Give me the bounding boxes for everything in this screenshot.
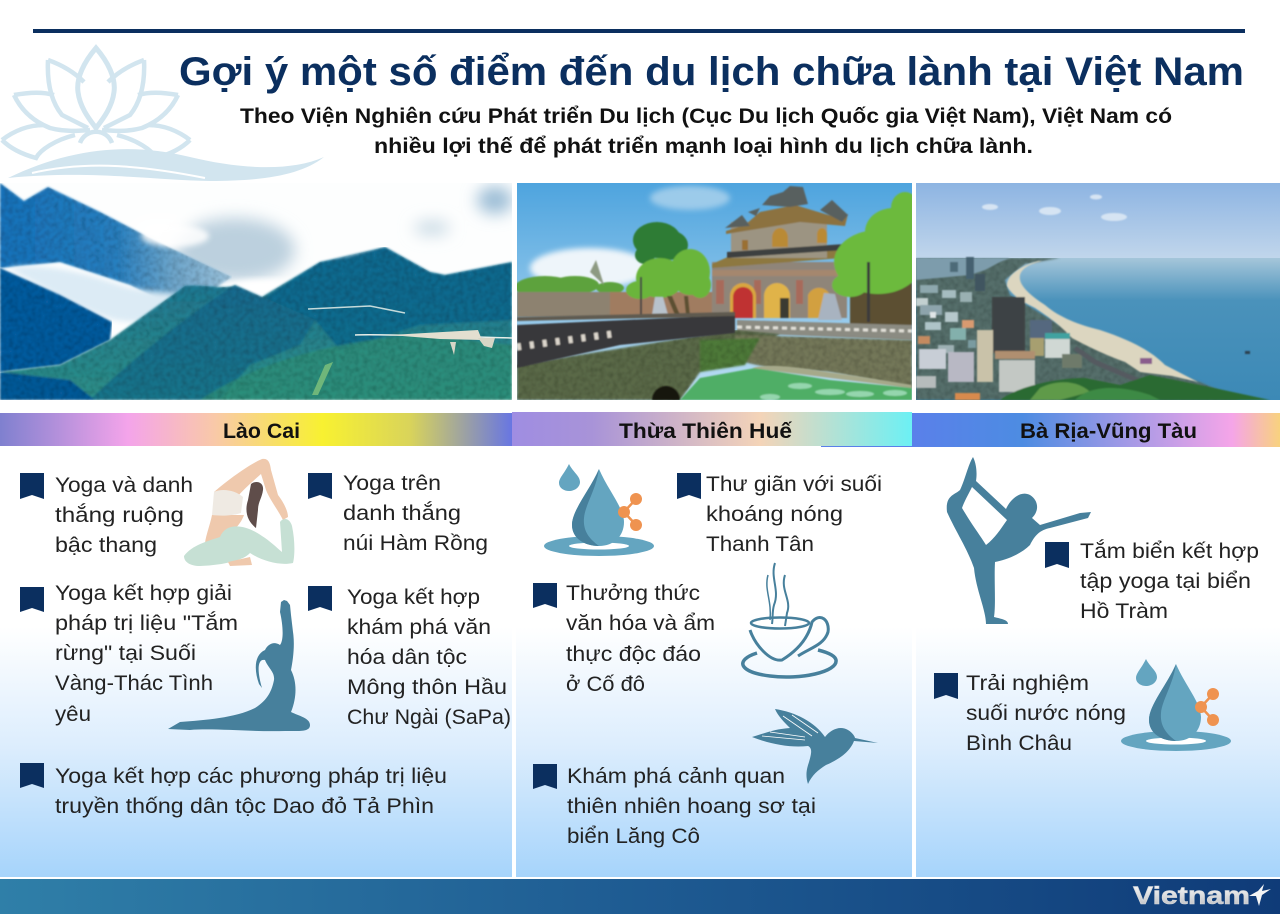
list item: Tắm biển kết hợp tập yoga tại biển Hồ Tràm: [1045, 538, 1259, 623]
list item: Yoga kết hợp khám phá văn hóa dân tộc Mông: Chư Ngài (SaPa): [347, 705, 511, 729]
list item: Yoga kết hợp giải pháp trị liệu Tắm rừng: yêu: [55, 702, 91, 726]
list item: Thưởng thức văn hóa và ẩm thực độc đáo ở Cố đô: [533, 581, 715, 696]
icon: mineral water drop (Thanh Tân): [544, 464, 654, 556]
list item: Khám phá cảnh quan thiên nhiên biển Lăng Cô: [533, 764, 816, 848]
header band: Thừa Thiên Huế: Thừa Thiên Huế: [619, 420, 792, 443]
list item: Khám phá cảnh quan thiên nhiên biển Lăng Cô: Khám phá cảnh quan: [567, 764, 785, 788]
footer bar: [0, 879, 1280, 914]
pond: [680, 368, 912, 400]
gate upper storey: [731, 222, 827, 258]
list item: Yoga kết hợp các phương pháp trị liệu truyền thống: [20, 763, 447, 818]
list item: Yoga và danh thắng ruộng bậc thang: [20, 473, 193, 557]
subtitle: Theo Viện Nghiên cứu Phát triển Du lịch (Cục Du lịch Quốc gia Việt Nam), Việt Nam có: [240, 104, 1172, 128]
list item: Yoga kết hợp khám phá văn hóa dân tộc Mông: Mông thôn Hầu: [347, 675, 507, 699]
gate lower storey: [712, 262, 847, 318]
list item: Thư giãn với suối khoáng nóng Thanh Tân: [677, 472, 882, 556]
list item: Thưởng thức văn hóa và ẩm thực độc đáo ở Cố đô: Thưởng thức: [566, 581, 700, 605]
icon: dancer pose silhouette: [947, 457, 1091, 624]
list item: Thưởng thức văn hóa và ẩm thực độc đáo ở Cố đô: ở Cố đô: [566, 672, 645, 696]
list item: Thư giãn với suối khoáng nóng Thanh Tân: Thư giãn với suối: [706, 472, 882, 496]
list item: Yoga kết hợp giải pháp trị liệu Tắm rừng: rừng" tại Suối: [55, 641, 196, 665]
list item: Thư giãn với suối khoáng nóng Thanh Tân: Thanh Tân: [706, 532, 814, 556]
list item: Yoga kết hợp các phương pháp trị liệu truyền thống: truyền thống dân tộc Dao đỏ Tả Phìn: [55, 794, 434, 818]
header band: Bà Rịa-Vũng Tàu: [912, 413, 1280, 447]
right trees: [850, 280, 912, 325]
list item: Yoga kết hợp khám phá văn hóa dân tộc Mông: hóa dân tộc: [347, 645, 467, 669]
photo: Vũng Tàu coastline: [916, 183, 1280, 400]
list item: Yoga kết hợp giải pháp trị liệu Tắm rừng: Vàng-Thác Tình: [55, 671, 213, 695]
list item: Yoga trên danh thắng núi Hàm Rồng: [308, 471, 488, 555]
header band: Lào Cai: Lào Cai: [223, 420, 300, 443]
photo: Huế imperial citadel gate: [515, 183, 922, 400]
list item: Tắm biển kết hợp tập yoga tại biển Hồ Tràm: tập yoga tại biển: [1080, 569, 1251, 593]
list item: Thưởng thức văn hóa và ẩm thực độc đáo ở Cố đô: thực độc đáo: [566, 642, 701, 666]
list item: Yoga kết hợp các phương pháp trị liệu truyền thống: Yoga kết hợp các phương pháp trị liệu: [55, 764, 447, 788]
photo: Lào Cai mountains: [0, 183, 513, 400]
list item: Yoga kết hợp giải pháp trị liệu Tắm rừng: Yoga kết hợp giải: [55, 581, 232, 605]
icon: tea cup: [743, 563, 836, 677]
header band: Lào Cai: [0, 413, 512, 446]
list item: Thưởng thức văn hóa và ẩm thực độc đáo ở Cố đô: văn hóa và ẩm: [566, 611, 715, 635]
list item: Tắm biển kết hợp tập yoga tại biển Hồ Tràm: Hồ Tràm: [1080, 599, 1168, 623]
header band: Thừa Thiên Huế: [512, 412, 912, 447]
list item: Trải nghiệm suối nước nóng Bình Châu: Trải nghiệm: [966, 671, 1089, 695]
subtitle: [240, 104, 1172, 158]
list item: Trải nghiệm suối nước nóng Bình Châu: suối nước nóng: [966, 701, 1126, 725]
background panels: [0, 446, 1280, 877]
list item: Tắm biển kết hợp tập yoga tại biển Hồ Tràm: Tắm biển kết hợp: [1080, 538, 1259, 563]
list item: Khám phá cảnh quan thiên nhiên biển Lăng Cô: biển Lăng Cô: [567, 824, 700, 848]
icon: cobra pose silhouette: [168, 600, 310, 731]
icon: lotus logo watermark: [2, 48, 324, 181]
icon: woman in pigeon yoga pose: [184, 459, 294, 566]
list item: Trải nghiệm suối nước nóng Bình Châu: Bình Châu: [966, 731, 1072, 755]
list item: Yoga kết hợp khám phá văn hóa dân tộc Mông: khám phá văn: [347, 615, 491, 639]
list item: Yoga trên danh thắng núi Hàm Rồng: núi Hàm Rồng: [343, 531, 488, 555]
list item: Yoga kết hợp khám phá văn hóa dân tộc Mông: Yoga kết hợp: [347, 585, 480, 609]
balustrades: [737, 320, 912, 340]
list item: Yoga và danh thắng ruộng bậc thang: bậc thang: [55, 533, 157, 557]
list item: Yoga trên danh thắng núi Hàm Rồng: Yoga trên: [343, 471, 441, 495]
list item: Yoga kết hợp giải pháp trị liệu Tắm rừng: pháp trị liệu "Tắm: [55, 610, 238, 635]
icon: mineral water drop (Bình Châu): [1121, 659, 1231, 751]
list item: Yoga kết hợp khám phá văn hóa dân tộc Mông: [308, 585, 511, 729]
city blocks: [966, 257, 974, 279]
list item: Thư giãn với suối khoáng nóng Thanh Tân: khoáng nóng: [706, 502, 843, 526]
list item: Trải nghiệm suối nước nóng Bình Châu: [934, 671, 1126, 755]
list item: Yoga và danh thắng ruộng bậc thang: thắng ruộng: [55, 502, 184, 527]
list item: Yoga kết hợp giải pháp trị liệu Tắm rừng: [20, 581, 238, 726]
icon: hummingbird: [752, 709, 878, 784]
header band: Bà Rịa-Vũng Tàu: Bà Rịa-Vũng Tàu: [1020, 420, 1197, 443]
title: Gợi ý một số điểm đến du lịch chữa lành tại Việt Nam: [179, 50, 1244, 94]
list item: Yoga và danh thắng ruộng bậc thang: Yoga và danh: [55, 473, 193, 497]
subtitle: nhiều lợi thế để phát triển mạnh loại hình du lịch chữa lành.: [374, 134, 1033, 158]
bridge stone and moss: [517, 330, 912, 400]
list item: Khám phá cảnh quan thiên nhiên biển Lăng Cô: thiên nhiên hoang sơ tại: [567, 794, 816, 818]
top rule: [33, 29, 1245, 33]
Vietnam+ logo: Vietnam: [1133, 882, 1250, 910]
list item: Yoga trên danh thắng núi Hàm Rồng: danh thắng: [343, 500, 461, 525]
